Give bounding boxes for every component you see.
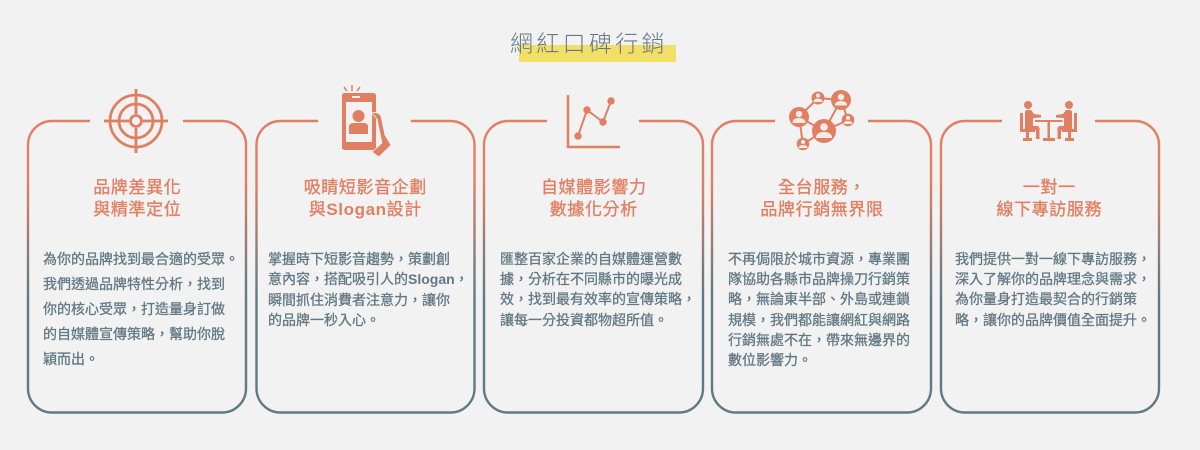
heading: 吸睛短影音企劃 [304,178,427,197]
panel: brand differentiation [28,89,246,412]
icon: people network [789,90,854,150]
heading: 一對一 [1023,178,1076,197]
heading: 自媒體影響力 [541,178,647,197]
body text: 深入了解你的品牌理念與需求， [955,271,1151,287]
body text: 的自媒體宣傳策略，幫助你脫 [43,326,225,342]
body text: 掌握時下短影音趨勢，策劃創 [268,251,450,267]
icon: meeting at table [1020,101,1077,141]
heading: 與精準定位 [93,200,181,219]
body text: 我們提供一對一線下專訪服務， [955,251,1151,267]
panel outline [712,121,931,412]
heading: 線下專訪服務 [996,200,1102,219]
body text: 穎而出。 [43,351,99,367]
heading: 品牌行銷無界限 [760,200,884,219]
panel outline [484,121,703,412]
body text: 匯整百家企業的自媒體運營數 [500,251,682,267]
heading: 與Slogan設計 [309,200,422,219]
body text: 的品牌一秒入心。 [268,312,380,328]
body text: 我們透過品牌特性分析，找到 [43,276,225,292]
panel: islandwide service [712,90,931,412]
body text: 不再侷限於城市資源，專業團 [728,251,910,267]
title [510,30,676,62]
body text: 數位影響力。 [728,352,812,368]
icon: line chart [568,95,620,147]
heading: 品牌差異化 [93,178,181,197]
title highlight [519,45,676,62]
panel: media analytics [484,95,703,412]
heading: 數據化分析 [550,200,638,219]
panel outline [256,121,474,412]
panel outline [941,121,1159,412]
body text: 略，無論東半部、外島或連鎖 [728,291,910,307]
title text: 網紅口碑行銷 [510,30,668,56]
body text: 行銷無處不在，帶來無邊界的 [728,332,910,348]
body text: 為你的品牌找到最合適的受眾。 [43,251,239,267]
heading: 全台服務， [778,178,866,197]
panel outline [28,121,246,412]
body text: 瞬間抓住消費者注意力，讓你 [268,292,450,308]
panel: short video and slogan [256,85,474,412]
icon: target [104,89,168,153]
body text: 你的核心受眾，打造量身訂做 [43,301,225,317]
body text: 為你量身打造最契合的行銷策 [955,291,1137,307]
body text: 效，找到最有效率的宣傳策略， [500,291,696,307]
body text: 規模，我們都能讓網紅與網路 [728,312,910,328]
body text: 據，分析在不同縣市的曝光成 [500,271,682,287]
body text: 隊協助各縣市品牌操刀行銷策 [728,271,910,287]
panel: one-on-one [941,101,1159,412]
body text: 略，讓你的品牌價值全面提升。 [955,312,1151,328]
body text: 意內容，搭配吸引人的Slogan， [268,271,469,287]
body text: 讓每一分投資都物超所值。 [500,312,668,328]
icon: phone in hand [342,85,391,157]
